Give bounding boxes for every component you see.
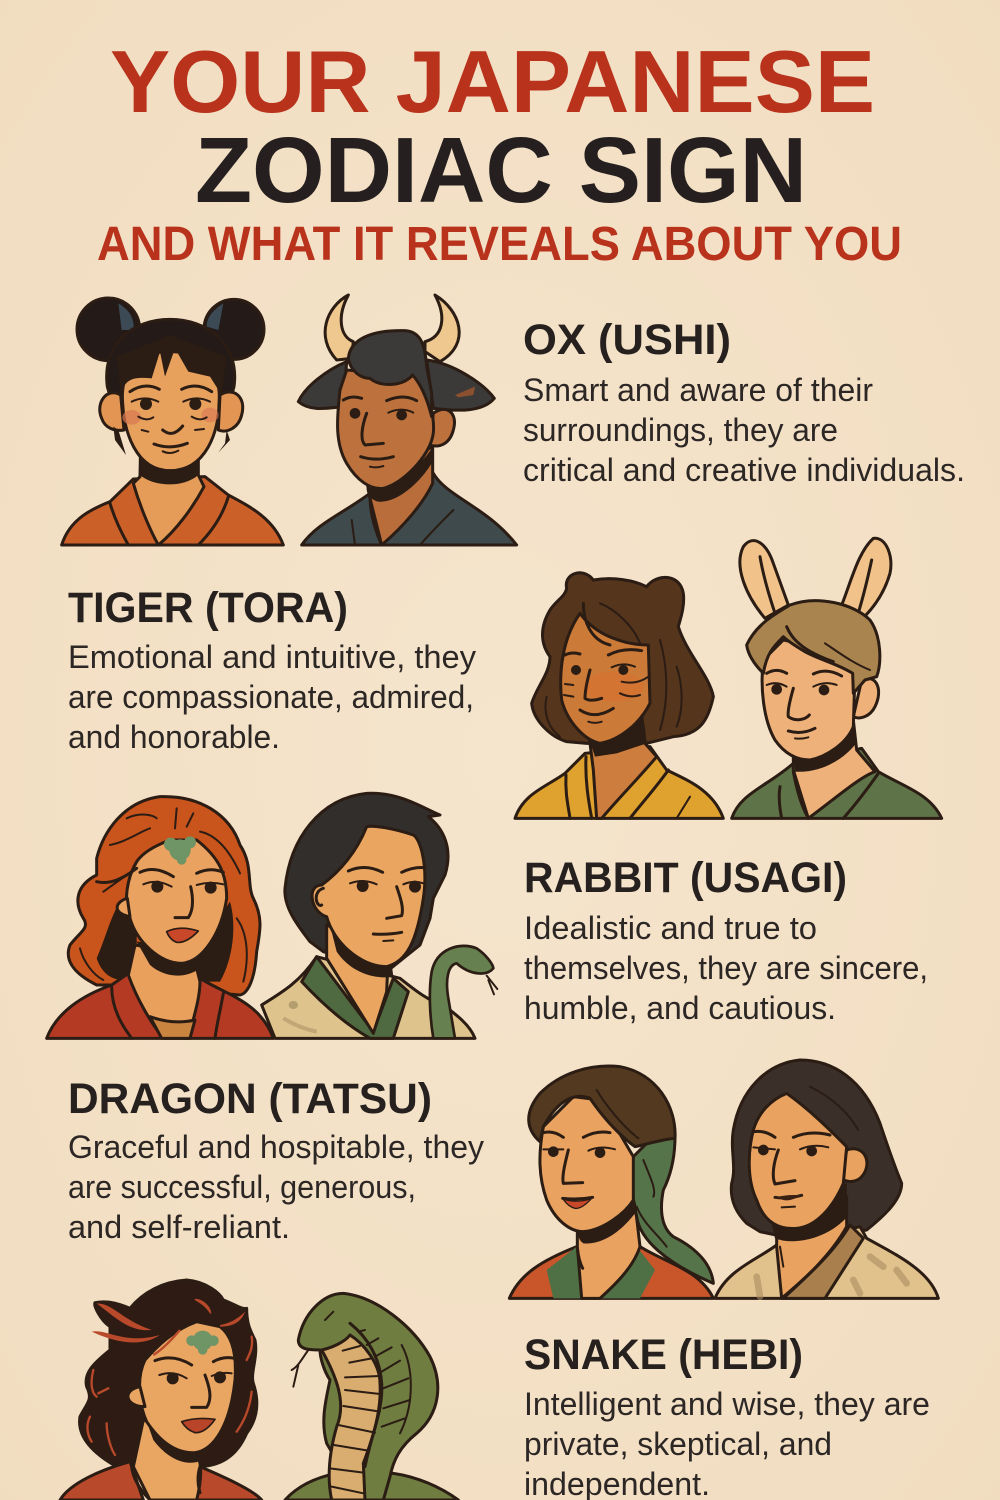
section: snake text: Intelligent and wise, they are bbox=[524, 1386, 930, 1422]
section: tiger text: and honorable. bbox=[68, 719, 280, 755]
illustration: man with bob hair bbox=[715, 1060, 938, 1298]
section: tiger text: TIGER (TORA) bbox=[68, 584, 348, 632]
title: ZODIAC SIGN bbox=[195, 118, 807, 222]
illustration: woman with flower mark bbox=[60, 1280, 262, 1500]
section: dragon text: are successful, generous, bbox=[68, 1169, 416, 1205]
section: ox text: critical and creative individuals. bbox=[523, 452, 965, 488]
section: dragon text bbox=[68, 1075, 484, 1245]
illustration: cobra bbox=[285, 1293, 458, 1500]
title: AND WHAT IT REVEALS ABOUT YOU bbox=[97, 218, 902, 271]
section: tiger text bbox=[68, 584, 476, 755]
section: rabbit text: humble, and cautious. bbox=[524, 990, 836, 1026]
illustration: woman with green braid bbox=[509, 1066, 713, 1298]
section: snake text: SNAKE (HEBI) bbox=[524, 1331, 803, 1379]
section: dragon text: and self-reliant. bbox=[68, 1209, 290, 1245]
illustration: tiger woman bbox=[515, 573, 723, 818]
illustration: dragon woman bbox=[47, 797, 273, 1038]
section: ox text: surroundings, they are bbox=[523, 412, 838, 448]
illustration: rabbit man bbox=[732, 538, 942, 818]
illustration: ox man bbox=[298, 295, 517, 545]
section: ox text: Smart and aware of their bbox=[523, 372, 873, 408]
section: snake text: private, skeptical, and bbox=[524, 1426, 832, 1462]
title: YOUR JAPANESE bbox=[110, 32, 875, 131]
section: rabbit text: Idealistic and true to bbox=[524, 910, 817, 946]
section: dragon text: Graceful and hospitable, they bbox=[68, 1129, 484, 1165]
section: tiger text: Emotional and intuitive, they bbox=[68, 639, 476, 675]
illustration: rat girl bbox=[62, 298, 283, 545]
section: dragon text: DRAGON (TATSU) bbox=[68, 1075, 432, 1123]
section: rabbit text bbox=[524, 854, 928, 1026]
section: rabbit text: RABBIT (USAGI) bbox=[524, 854, 847, 902]
illustration: man with small snake bbox=[262, 793, 497, 1038]
section: ox text: OX (USHI) bbox=[523, 316, 731, 364]
section: tiger text: are compassionate, admired, bbox=[68, 679, 474, 715]
section: snake text bbox=[524, 1331, 930, 1500]
section: rabbit text: themselves, they are sincere, bbox=[524, 950, 928, 986]
title bbox=[97, 32, 902, 271]
section: ox text bbox=[523, 316, 965, 488]
